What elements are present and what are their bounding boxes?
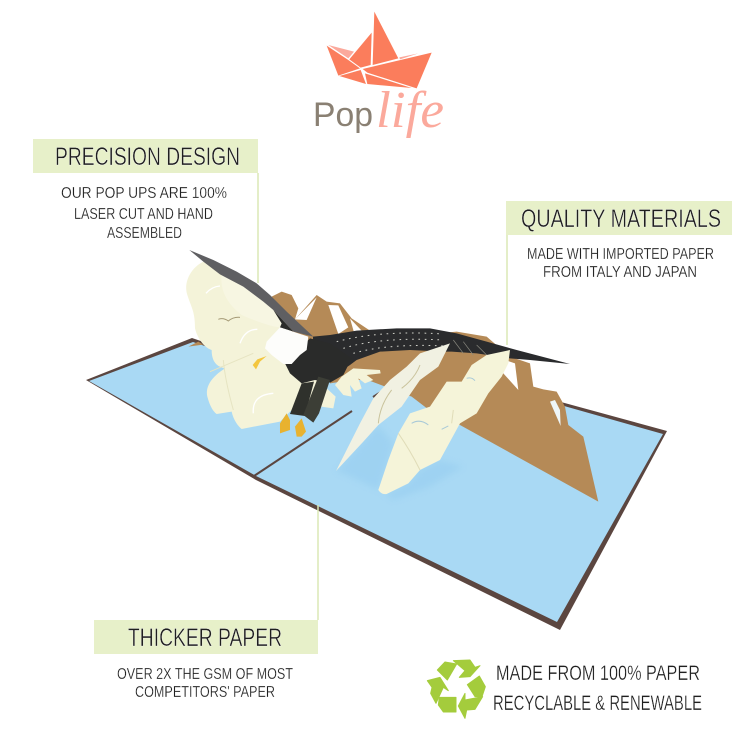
- logo wordmark life: life: [376, 82, 444, 139]
- icon: recycle symbol: [427, 660, 485, 718]
- callout: precision design: PRECISION DESIGN: [55, 143, 240, 171]
- eagle talons: [280, 413, 290, 433]
- callout: quality materials: [506, 201, 732, 345]
- recyclable paper text: [493, 662, 702, 715]
- right wing: [313, 328, 570, 378]
- callout: precision design: OUR POP UPS ARE 100%: [61, 185, 227, 202]
- eagle legs and tail: [290, 382, 314, 416]
- mountains right: [330, 332, 598, 502]
- callout: thicker paper: [94, 505, 318, 701]
- callout: thicker paper: COMPETITORS' PAPER: [135, 684, 275, 701]
- callout: thicker paper: THICKER PAPER: [128, 624, 282, 652]
- eagle beak: [253, 356, 267, 369]
- eagle body: [253, 327, 381, 437]
- eagle head: [265, 327, 308, 364]
- callout: precision design: LASER CUT AND HAND: [74, 206, 213, 223]
- callout: precision design: [33, 139, 258, 283]
- illustration: pop-up card with eagle: [86, 250, 667, 630]
- callout: quality materials: FROM ITALY AND JAPAN: [543, 264, 697, 281]
- callout: precision design: ASSEMBLED: [107, 225, 182, 242]
- card backing: [86, 338, 667, 630]
- eagle feathers: [335, 368, 381, 397]
- mountains left: [188, 292, 383, 380]
- upper wing: [189, 250, 313, 337]
- fold line: [254, 411, 352, 476]
- card blue paper: [89, 342, 663, 622]
- right wing clouds: [336, 343, 510, 494]
- logo: Poplife: [313, 12, 444, 139]
- left clouds: [186, 262, 336, 429]
- logo wordmark Pop: Pop: [313, 96, 373, 134]
- callout: thicker paper: OVER 2X THE GSM OF MOST: [117, 666, 293, 683]
- cloud shadows on card: [336, 425, 463, 500]
- icon: origami boat: [327, 12, 432, 88]
